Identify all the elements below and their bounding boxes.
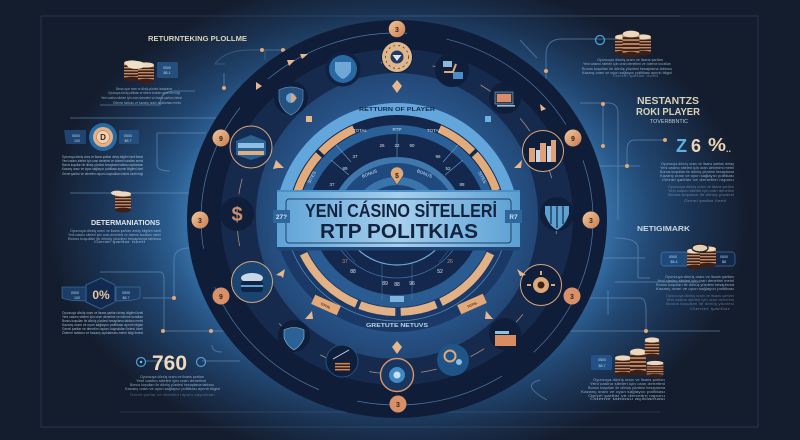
banner wing: left: 27? [276,214,287,221]
icon: coin stack top right [596,31,651,58]
text block lower right: Bonus koşulları ile dönüş yüzdesi hesaplama [588,386,665,390]
arch table values: BONUS [361,168,378,179]
text block left four [62,311,143,335]
icon: half shield [274,81,308,115]
zero percent emblem [62,278,140,309]
text block left three: Bonus koşulları ile dönüş yüzdesi hesaplama tablosu [68,237,161,241]
stat: 26 percent: 6 [691,136,701,156]
number badge: upper right [564,130,582,146]
number badge: lower right: 3 [570,294,574,301]
text block left two: Oyuncuya dönüş oranı ve lisans şartları detay bilgileri özeti listesi [62,155,143,159]
text block left four: Genel şartlar ve denetim raporu kaynakları listesi özeti [62,327,143,331]
icon: coin stack left [111,191,131,212]
text block left two: Kazanç oranı ve oyun sağlayıcı politikası ayrıntı bilgileri özet [62,167,143,171]
number badge: upper left: 9 [219,136,223,143]
coin stack with tags right: $8.4 [670,260,678,264]
stat: 26 percent: Z [676,136,687,156]
arch table values: 22 [394,143,400,148]
lower dial values: 88 [350,269,356,275]
text block left four: Yeni casino siteleri için oran denetimi ve ödeme kuralları [62,315,143,319]
arch table values: BONUS [416,168,433,179]
text block right three: Yeni casino siteleri için oran denetimi metni [657,279,734,283]
number badge: mid right: 3 [589,218,593,225]
text block top right: Genel şartlar özeti [613,74,658,78]
text block top left: Yeni casino siteleri için oran denetimi ve lisans şartları listesi [101,96,182,100]
icon: folder [489,318,521,350]
stat: 26 percent: % [708,135,726,155]
text block right two: Genel şartlar özeti [684,199,726,203]
icon: coin stack top left [124,60,154,83]
text block 760: Genel şartlar ve denetim raporu kaynakları [130,393,215,397]
text block left two: Yeni casino siteleri için oran denetimi ve ödeme kuralları metni [62,159,143,163]
connector lines: right [400,16,720,400]
coin stack with tags right: 0500 [720,255,728,259]
lower dial values: 37 [342,259,348,265]
lower dial values: 89 [382,281,388,287]
outer dark ring [187,20,607,418]
orbit lines [201,33,593,405]
lower dial values [342,259,453,288]
number badge: top [388,20,406,38]
coin stack with tags right [661,244,735,269]
text block top left: Ödeme tablosu ve kazanç oranı açıklaması metni [113,101,181,105]
lower dial values: 52 [437,269,443,275]
icon: lower shield [278,320,310,352]
arch table values: TOTAL [353,128,368,133]
number badge: bottom: 3 [396,402,400,409]
subtitle text: RTP POLITKIAS [320,221,478,243]
tag top left: 0500 [163,66,171,70]
text block lower right: Genel şartlar ve denetim raporu [588,394,665,398]
lower dial values: 96 [409,281,415,287]
banner wing: left [273,210,290,223]
text block 760 [125,375,220,397]
lower dial values: 88 [394,282,400,288]
text block top right: Bonus koşulları ile dönüş yüzdesi hesaplama tablosu [582,67,672,71]
heading: determinations: DETERMANIATIONS [91,220,160,227]
upper gold segments [294,125,500,190]
text block right two: Yeni casino siteleri için oran denetimi [668,189,734,193]
text block left four: Ödeme tablosu ve kazanç açıklaması metni bilgi listesi [62,331,143,335]
heading: netigimark: NETIGIMARK [637,224,691,233]
text block right four [666,294,734,311]
text block 760: Yeni casino siteleri için oran denetimi [136,379,206,383]
icon: gold coin with tags: $8.7 [124,139,132,143]
text block right three: Oyuncuya dönüş oranı ve lisans şartları [665,275,734,279]
icon: laptop [489,82,521,114]
icon: transfer [435,53,469,87]
text block left four: Bonus koşulları ile dönüş yüzdesi hesaplama tablosu metni [62,319,143,323]
icon: gold coin with tags: 0500 [124,134,132,138]
text block right four: Oyuncuya dönüş oranı ve lisans şartları [666,294,734,298]
text block lower right [581,378,665,401]
text block right two [668,185,734,203]
tag lower right: 0500 [598,358,606,362]
text block right four: Genel şartlar [690,307,732,311]
number badge: mid left: 3 [198,218,202,225]
icon: gold coin with tags: D [100,133,106,142]
text block left three: Genel şartlar özeti [94,240,145,244]
tag top left [157,62,178,78]
icon: dollar: $ [231,204,243,226]
heading: right [636,95,700,125]
text block top right: Yeni casino siteleri için oran denetimi ve ödeme kuralları [583,62,671,66]
arch table values: TOTAL [427,128,442,133]
text block right one: Yeni casino siteleri için oran denetimi metni [660,166,734,170]
text block top right: Oyuncuya dönüş oranı ve lisans şartları [597,58,663,62]
lower dial caption: GRETUTE NETUVS [366,323,428,329]
icon: coins arrow [326,345,358,377]
number badge: upper left [212,130,230,146]
lower gold segments [300,252,494,316]
heading: right: NESTANTZS [637,95,699,107]
arch table values: 90 [409,143,415,148]
heading: right: TOVERBBNTIC [650,119,688,125]
text block left three: Oyuncuya dönüş oranı ve lisans şartları detay bilgileri özeti [70,229,161,233]
text block top right [582,58,672,78]
text block right one: Kazanç oranı ve oyun sağlayıcı politikası [660,174,734,178]
text block top right: Kazanç oranı ve oyun sağlayıcı politikası ayrıntı bilgisi [582,71,672,75]
coin stack with tags right: $8 [722,260,726,264]
stat: 26 percent: .. [726,144,731,154]
text block lower right: Oyuncuya dönüş oranı ve lisans şartları [593,378,665,382]
text block right one: Genel şartlar ve denetim raporu [662,178,734,182]
connector nodes [161,48,667,333]
banner wing: right [505,210,522,223]
lower gold tags: TOTAL [467,301,478,309]
arch table values: SITES [477,170,488,184]
arch table values [306,127,488,187]
text block 760: Bonus koşulları ile dönüş yüzdesi hesaplama tablosu [130,383,214,387]
text block right three: Bonus koşulları ile dönüş yüzdesi hesaplama [656,283,734,287]
connector lines: left [70,50,320,361]
arch table values: 88 [459,182,465,187]
tag lower right: $8.7 [598,364,606,368]
text block top left [101,87,182,105]
text block lower right: Kazanç oranı ve oyun sağlayıcı politikası [581,390,665,394]
centre pin [390,167,404,185]
orbit arrows [256,54,546,354]
arch table values: 89 [342,166,348,171]
icon: coin stack lower right [615,337,663,378]
tag top left: $8.1 [164,71,170,75]
text block right one [660,162,734,182]
lower gold tags [311,294,487,315]
title banner [273,190,522,250]
lower gold tags: TOTAL [320,302,331,310]
text block left two: Bonus koşulları ile dönüş yüzdesi hesaplama tablosu açıklaması [62,163,143,167]
text block left four: Oyuncuya dönüş oranı ve lisans şartları detay bilgileri özeti [62,311,143,315]
zero percent emblem: $8.7 [122,296,130,300]
text block top left: Bonus oyun oranı ve dönüş yüzdesi hesaplama [116,87,172,91]
icon: bar chart [522,130,564,172]
arch caption: RETTURN OF PLAYER [359,107,436,113]
zero percent emblem: 0500 [122,291,130,295]
icon: shield lines [540,197,574,231]
text block right three: Kazanç oranı ve oyun sağlayıcı politikası [656,287,734,291]
text block left two [62,155,143,176]
text block left three: Yeni casino siteleri için oran denetimi ve ödeme kuralları metni [68,233,161,237]
title text: YENİ CÁSINO SİTELLERİ [305,200,497,221]
text block top left: Oyuncuya dönüş politikası ve ödeme kuralları genel özet bilgi [108,91,180,95]
number badge: mid left [192,212,208,228]
stat: 760 [136,352,206,375]
text block left two: Genel şartlar ve denetim raporu kaynakları listesi özeti bilgi [62,172,143,176]
upper arch [280,103,514,190]
zero percent emblem: 0% [92,288,110,302]
arch table values: RTP [393,127,401,132]
text block right four: Yeni casino siteleri için oran denetimi [666,298,734,302]
inner orbit band [221,49,573,385]
arch table values: 37 [329,182,335,187]
icon: gold coin with tags: 0500 [72,134,80,138]
icon: gold coin with tags: 100 [74,139,80,143]
icon: dollar [220,197,254,231]
arch table values: 96 [435,154,441,159]
arch table values: SITES [306,170,317,184]
number badge: mid right [582,212,600,228]
number badge: upper right: 9 [571,136,575,143]
middle blue disc [256,73,538,359]
stat: 26 percent [676,135,731,156]
zero percent emblem: 0500 [71,291,79,295]
text block lower right: Ödeme tablosu açıklaması [590,397,665,401]
heading: right: ROKI PLAYER [636,106,700,118]
icon: top heart badge [382,42,412,72]
icon: gear coin [520,264,562,306]
text block right four: Bonus koşulları ile dönüş yüzdesi [666,302,734,306]
text block right one: Oyuncuya dönüş oranı ve lisans şartları detay [661,162,734,166]
tag lower right [591,355,612,370]
arch table values: 26 [379,143,385,148]
text block left three [68,229,161,244]
text block left four: Kazanç oranı ve oyun sağlayıcı politikası ayrıntı bilgisi [62,323,143,327]
centre pin: $ [395,173,399,180]
banner wing: right: R7 [509,214,518,221]
text block lower right: Yeni casino siteleri için oran denetimi [590,382,665,386]
number badge: bottom [390,396,406,412]
coin stack with tags right: 0500 [669,255,677,259]
icon: lower coin [380,358,414,392]
icon: gold coin with tags [64,123,139,151]
text block right two: Bonus koşulları ile dönüş yüzdesi [668,193,734,197]
text block 760: Kazanç oranı ve oyun sağlayıcı politikası ayrıntı bilgisi [125,387,220,391]
lower dial values: 26 [447,259,453,265]
icon: chest [230,126,272,168]
icon: gear [437,344,469,376]
icon: chips [232,262,272,302]
text block right two: Oyuncuya dönüş oranı ve lisans şartları [668,185,734,189]
text block right three [656,275,734,291]
number badge: lower left: 9 [219,294,223,301]
icon: shield [326,52,360,86]
arch table values: 52 [445,166,451,171]
number badge: lower right [564,288,580,304]
number badge: lower left [212,288,230,304]
text block 760: Oyuncuya dönüş oranı ve lisans şartları [140,375,204,379]
number badge: top: 3 [395,27,399,34]
lower semicircle dial [280,250,514,332]
text block right one: Bonus koşulları ile dönüş yüzdesi hesaplama [660,170,734,174]
stat: 760: 760 [152,352,187,375]
heading: top left: RETURNTEKING PLOLLME [148,34,247,43]
zero percent emblem: 100 [74,296,80,300]
arch table values: 37 [352,154,358,159]
